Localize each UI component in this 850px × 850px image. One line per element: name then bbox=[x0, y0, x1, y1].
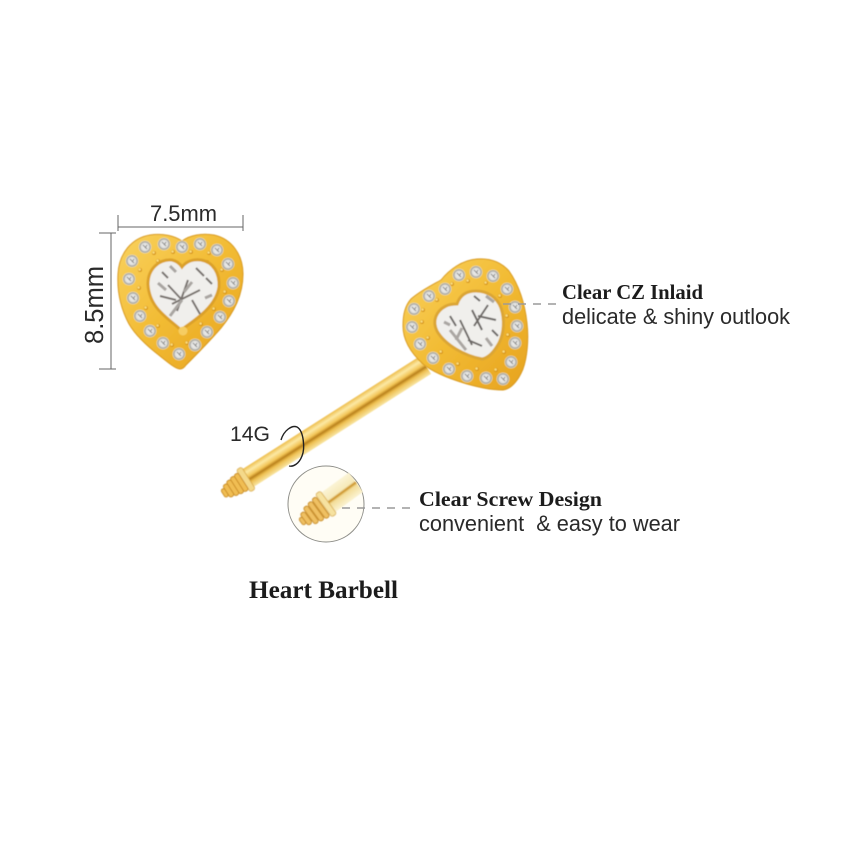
dimension: height 8.5mm: 8.5mm bbox=[81, 266, 109, 344]
icon: side view heart head bbox=[403, 259, 528, 390]
callout: clear screw design: convenient & easy to wear bbox=[419, 511, 680, 536]
icon: front view heart earring bbox=[118, 234, 243, 369]
callout: clear CZ inlaid: delicate & shiny outlook bbox=[562, 304, 791, 329]
dimension: width 7.5mm: 7.5mm bbox=[150, 201, 217, 226]
stones ring bbox=[406, 266, 523, 385]
title: Heart Barbell: Heart Barbell bbox=[249, 575, 398, 604]
dimension: width 7.5mm bbox=[118, 201, 243, 231]
stones ring bbox=[123, 238, 239, 360]
label: 14G gauge bbox=[230, 423, 304, 466]
center stone bbox=[435, 291, 503, 359]
callout: clear CZ inlaid: Clear CZ Inlaid bbox=[562, 280, 703, 304]
beads between stones bbox=[137, 250, 227, 347]
label: 14G gauge: 14G bbox=[230, 423, 270, 446]
callout: clear screw design: Clear Screw Design bbox=[419, 487, 602, 511]
callout: clear screw design bbox=[342, 487, 680, 536]
screw threads bbox=[218, 473, 249, 502]
icon: barbell shaft bbox=[216, 354, 432, 505]
callout: clear CZ inlaid bbox=[503, 280, 791, 329]
center stone bbox=[148, 260, 219, 330]
beads between stones bbox=[420, 279, 510, 372]
icon: screw detail magnifier bbox=[288, 466, 364, 542]
dimension: height 8.5mm bbox=[81, 233, 116, 369]
